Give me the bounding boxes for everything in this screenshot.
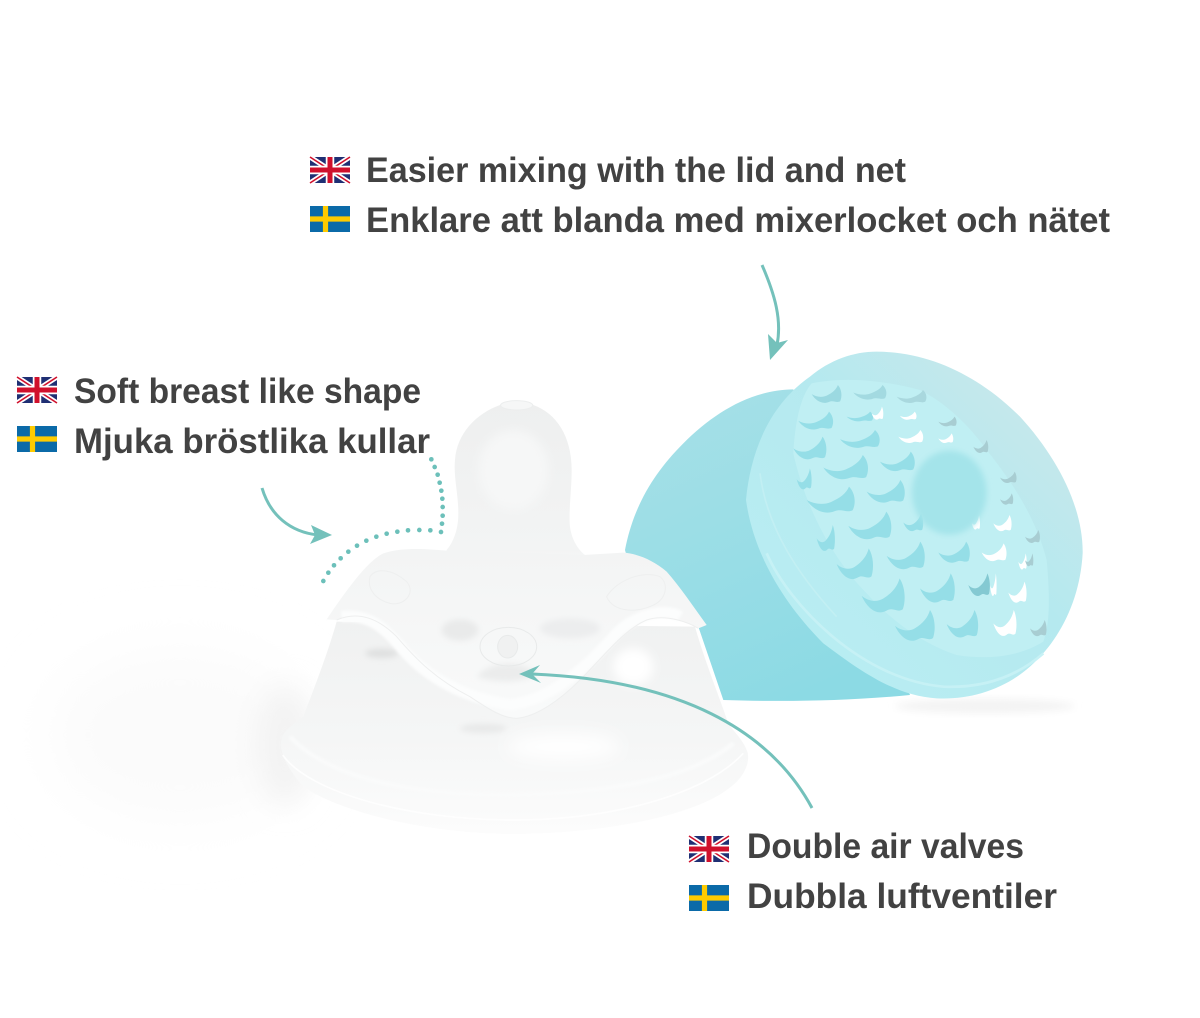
icon: Swedish flag [310, 206, 350, 232]
lid rim [746, 352, 1083, 699]
arrow: to air valves [519, 665, 812, 808]
lid net [793, 380, 1049, 657]
heading: mixing, Swedish: Enklare att blanda med mixerlocket och nätet [366, 201, 1110, 240]
heading: valves, Swedish: Dubbla luftventiler [747, 877, 1057, 916]
heading: shape, English: Soft breast like shape [74, 372, 421, 411]
arrow: to breast shape [262, 488, 332, 544]
wave highlight band [342, 613, 680, 705]
heading: mixing, English: Easier mixing with the lid and net [366, 151, 906, 190]
icon: UK flag [689, 836, 729, 862]
blue dome [625, 389, 910, 701]
teat [445, 402, 586, 613]
blue mixer lid product [625, 352, 1083, 701]
heading: valves, English: Double air valves [747, 827, 1024, 866]
base dome and flange [281, 622, 748, 834]
air valve [480, 627, 537, 666]
wing flange [327, 549, 707, 718]
wing ovals [369, 571, 665, 610]
icon: UK flag [310, 157, 350, 183]
icon: Swedish flag [689, 885, 729, 911]
dotted curve: breast shape outline [321, 457, 445, 583]
center knob [912, 451, 987, 535]
icon: Swedish flag [17, 426, 57, 452]
inner shadow around valves [442, 618, 600, 681]
clear nipple product [281, 401, 748, 834]
heading: shape, Swedish: Mjuka bröstlika kullar [74, 422, 430, 461]
arrow: to mixer lid [762, 265, 788, 360]
icon: UK flag [17, 377, 57, 403]
soft reflections [365, 648, 653, 760]
soft floor shadow [50, 650, 1075, 820]
